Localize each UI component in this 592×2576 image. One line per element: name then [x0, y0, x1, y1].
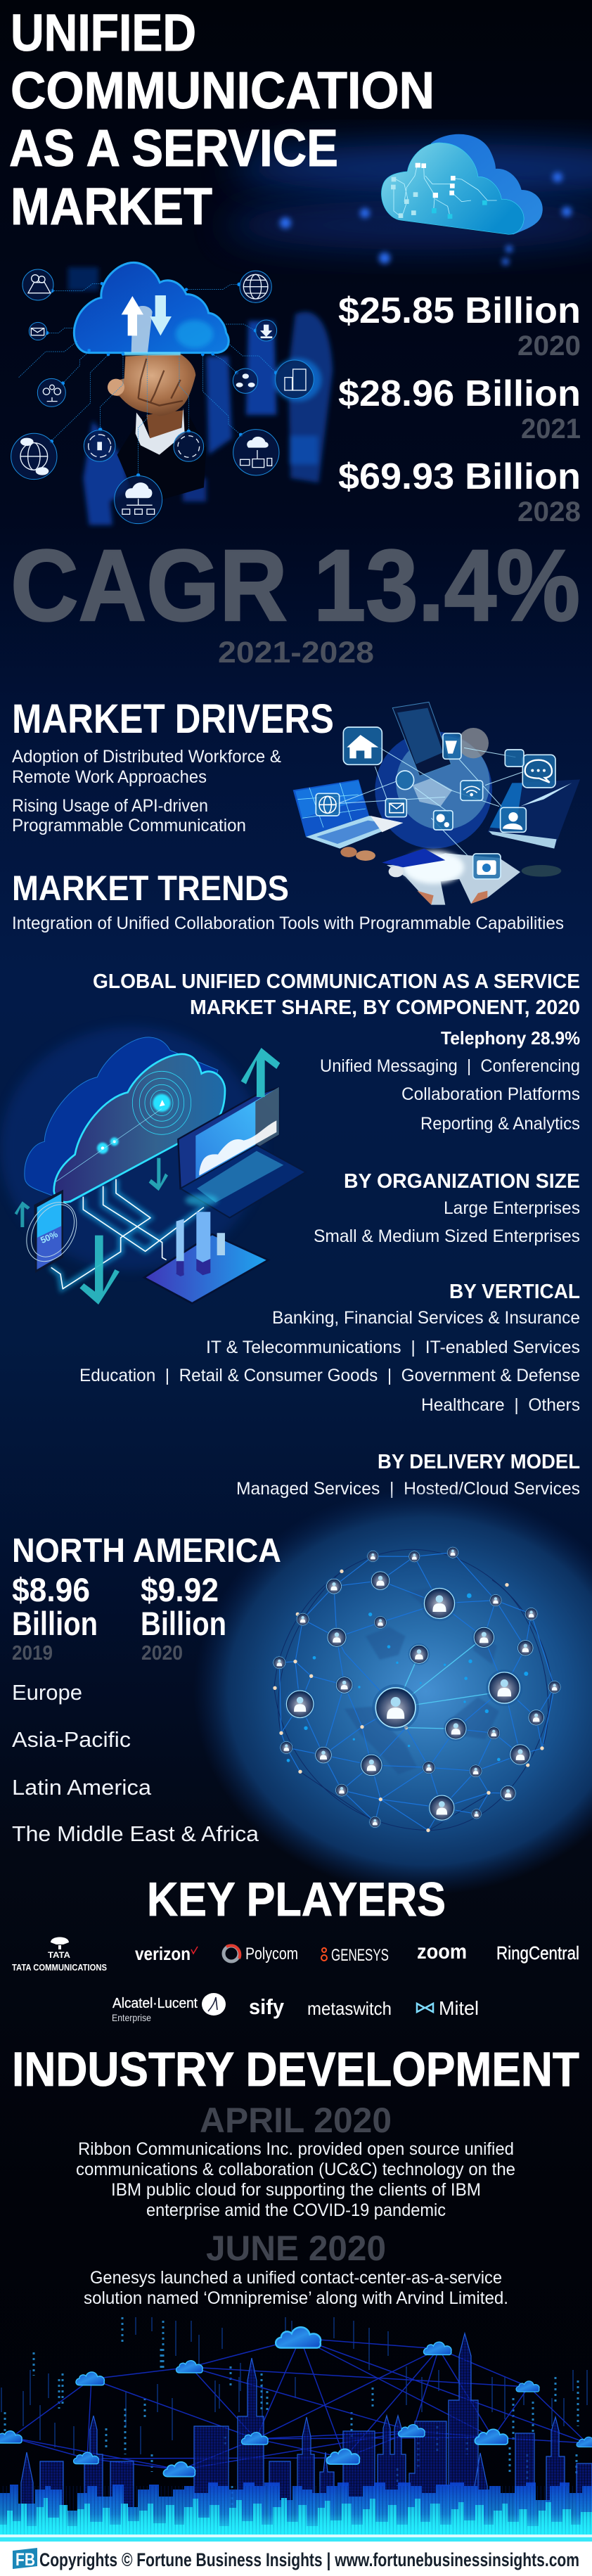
development: June 2020: JUNE 2020	[206, 2229, 386, 2268]
development: June 2020	[84, 2229, 508, 2308]
market size values: $69.93 Billion	[338, 456, 581, 497]
title: UNIFIED	[11, 4, 196, 62]
market size values	[338, 290, 581, 527]
logo: Verizon: verizon	[135, 1943, 191, 1964]
by delivery model: BY DELIVERY MODEL	[378, 1451, 580, 1473]
by delivery model	[236, 1451, 580, 1499]
logo: Tata Communications	[12, 1937, 107, 1973]
value 2019	[12, 1571, 98, 1665]
footer bar	[0, 2542, 592, 2576]
industry development panel	[12, 2042, 579, 2308]
by vertical: Healthcare | Others	[421, 1395, 580, 1415]
logo: Mitel: Mitel	[439, 1997, 479, 2019]
value 2020	[141, 1571, 226, 1665]
market trends panel	[12, 869, 564, 933]
other regions: Europe	[12, 1680, 82, 1705]
logo: Alcatel-Lucent Enterprise: Alcatel·Lucent	[112, 1996, 198, 2011]
market size values: $25.85 Billion	[338, 290, 581, 331]
value 2020: $9.92	[141, 1571, 219, 1608]
logo: RingCentral: RingCentral	[496, 1942, 579, 1963]
by delivery model: Managed Services | Hosted/Cloud Services	[236, 1479, 580, 1499]
logo: Polycom: Polycom	[245, 1944, 298, 1963]
logo: Zoom: zoom	[417, 1940, 467, 1963]
drivers text: Adoption of Distributed Workforce &	[12, 747, 281, 767]
trend text: Integration of Unified Collaboration Tools with Programmable Capabilities	[12, 914, 564, 933]
logo: Alcatel-Lucent Enterprise: Enterprise	[112, 2012, 151, 2023]
segmentation panel	[79, 970, 580, 1499]
market size values: 2020	[517, 331, 581, 361]
by vertical: BY VERTICAL	[449, 1281, 580, 1303]
by organization size: Large Enterprises	[444, 1198, 580, 1218]
development: April 2020: Ribbon Communications Inc. provided open source unified	[78, 2139, 514, 2159]
illustration: digital city skyline with clouds	[0, 2317, 592, 2542]
title	[9, 4, 435, 236]
heading: market share by component: MARKET SHARE, BY COMPONENT, 2020	[190, 997, 580, 1019]
logo: Genesys: GENESYS	[331, 1946, 389, 1965]
regional panel	[12, 1532, 281, 1846]
value 2020: Billion	[141, 1605, 226, 1642]
illustration: hand touching cloud with service icons	[11, 262, 333, 525]
logo: Mitel	[417, 1997, 479, 2019]
other regions	[12, 1680, 259, 1846]
value 2019: $8.96	[12, 1571, 90, 1608]
by component list: Unified Messaging | Conferencing	[320, 1056, 580, 1076]
development: June 2020: solution named ‘Omnipremise’ along with Arvind Limited.	[84, 2288, 508, 2308]
by component list: Reporting & Analytics	[420, 1114, 580, 1134]
illustration: connected devices on a hand	[293, 702, 580, 905]
other regions: The Middle East & Africa	[12, 1821, 259, 1846]
market size values: $28.96 Billion	[338, 373, 581, 414]
development: April 2020	[76, 2101, 515, 2220]
logo: Sify: sify	[249, 1994, 285, 2019]
by vertical	[79, 1281, 580, 1415]
development: April 2020: IBM public cloud for supporting the clients of IBM	[111, 2180, 481, 2200]
development: April 2020: APRIL 2020	[200, 2101, 392, 2140]
other regions: Latin America	[12, 1775, 152, 1800]
illustration: isometric cloud, laptop, phone and tablet: 50%	[39, 1229, 59, 1245]
heading: market share by component: GLOBAL UNIFIED COMMUNICATION AS A SERVICE	[93, 970, 580, 993]
heading: key players: KEY PLAYERS	[147, 1873, 446, 1926]
logo: Fortune Business Insights: FB	[15, 2550, 35, 2570]
by organization size: BY ORGANIZATION SIZE	[344, 1170, 580, 1193]
by component list: Telephony 28.9%	[441, 1027, 580, 1049]
other regions: Asia-Pacific	[12, 1727, 131, 1752]
by component list	[320, 1027, 580, 1134]
logo: Tata Communications: TATA COMMUNICATIONS	[12, 1962, 107, 1973]
by vertical: Education | Retail & Consumer Goods | Government & Defense	[79, 1366, 580, 1385]
drivers text: Remote Work Approaches	[12, 767, 207, 787]
heading: market trends: MARKET TRENDS	[12, 869, 289, 908]
market size values: 2021	[521, 414, 581, 444]
illustration: globe network of people	[193, 1487, 592, 1895]
by vertical: Banking, Financial Services & Insurance	[272, 1308, 580, 1328]
heading: market drivers: MARKET DRIVERS	[12, 696, 334, 742]
value 2019: Billion	[12, 1605, 98, 1642]
logo: Polycom	[224, 1944, 298, 1963]
illustration: isometric cloud, laptop, phone and tablet	[0, 1027, 306, 1305]
logo: Genesys	[321, 1946, 389, 1965]
by vertical: IT & Telecommunications | IT-enabled Services	[206, 1338, 580, 1357]
development: June 2020: Genesys launched a unified contact-center-as-a-service	[90, 2268, 502, 2288]
heading: market share by component	[93, 970, 580, 1019]
development: April 2020: communications & collaboration (UC&C) technology on the	[76, 2160, 515, 2179]
key players panel	[12, 1873, 579, 2023]
development: April 2020: enterprise amid the COVID-19 pandemic	[146, 2200, 446, 2220]
title: COMMUNICATION	[11, 61, 435, 120]
by organization size	[314, 1170, 580, 1246]
drivers text: Programmable Communication	[12, 816, 246, 835]
title: MARKET	[11, 177, 212, 236]
drivers text: Rising Usage of API-driven	[12, 796, 208, 816]
by organization size: Small & Medium Sized Enterprises	[314, 1226, 580, 1246]
CAGR callout: 2021-2028	[218, 636, 374, 669]
market size values: 2028	[517, 496, 581, 527]
logo: Metaswitch: metaswitch	[307, 1998, 392, 2019]
by component list: Collaboration Platforms	[401, 1084, 580, 1104]
title: AS A SERVICE	[9, 119, 338, 177]
logo: Tata Communications: TATA	[48, 1950, 70, 1960]
drivers text	[12, 747, 281, 835]
market drivers panel	[12, 696, 334, 835]
logo: Alcatel-Lucent Enterprise	[112, 1993, 226, 2023]
heading: north america: NORTH AMERICA	[12, 1532, 281, 1570]
illustration: header cloud with circuit lines	[225, 134, 592, 265]
value 2020: 2020	[141, 1642, 183, 1665]
value 2019: 2019	[12, 1642, 53, 1665]
